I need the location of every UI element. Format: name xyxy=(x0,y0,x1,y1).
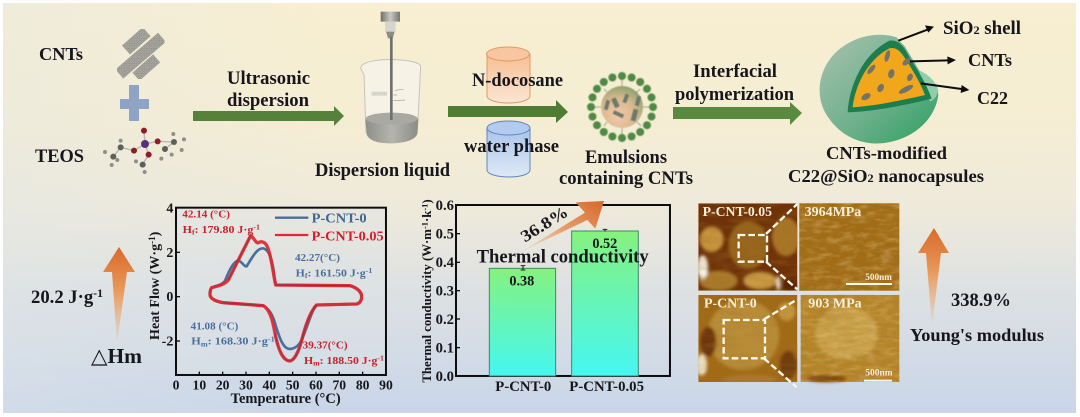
label: TEOS: TEOS xyxy=(35,147,84,167)
annotations: blue crystallization xyxy=(295,252,373,280)
annotations: blue crystallization: -1 xyxy=(366,266,373,275)
legend: P-CNT-0 xyxy=(312,211,367,226)
arrow: enthalpy increase xyxy=(103,247,135,344)
scale bars xyxy=(846,284,892,381)
plot frame xyxy=(456,205,670,376)
y axis tick labels: 0.5 xyxy=(436,227,454,243)
icon: carbon nanotubes xyxy=(119,32,162,77)
value label: 0.38: 0.38 xyxy=(509,274,534,290)
annotations: red melting: m xyxy=(313,359,320,368)
label: Ultrasonic dispersion: Ultrasonic xyxy=(227,69,310,89)
AFM labels: 3964MPa xyxy=(805,204,862,219)
x axis tick labels: 90 xyxy=(379,378,393,393)
label: 20.2 J/g: 20.2 J·g xyxy=(31,287,94,308)
annotations: blue crystallization: H xyxy=(296,267,304,279)
annotations: blue crystallization: : 161.50 J·g xyxy=(308,267,366,279)
x axis tick labels: 80 xyxy=(356,378,370,393)
annotations: red melting: -1 xyxy=(377,354,384,363)
x axis tick labels: 30 xyxy=(239,378,253,393)
label: Thermal conductivity: Thermal conductivity xyxy=(477,246,649,267)
plot frame xyxy=(176,208,386,375)
label: Emulsions containing CNTs: containing CNTs xyxy=(559,169,693,189)
curve: P-CNT-0.05 xyxy=(210,236,362,361)
chart: DSC heat flow curves xyxy=(147,201,393,407)
label: 20.2 J/g: -1 xyxy=(93,286,103,300)
chart: thermal conductivity bars xyxy=(420,198,670,395)
y axis tick labels: 0.0 xyxy=(436,369,454,385)
AFM labels: 500nm xyxy=(865,367,893,377)
icon: beaker with ultrasonic probe xyxy=(361,12,421,143)
panel: AFM images xyxy=(696,203,899,387)
AFM P-CNT-0.05 overview xyxy=(697,203,800,291)
annotations: red melting xyxy=(303,340,384,368)
annotations: blue melting: -1 xyxy=(268,334,275,343)
x axis tick labels: 0 xyxy=(173,378,180,393)
y axis tick labels: 4 xyxy=(166,201,173,216)
label: CNTs-modified C22@SiO2 nanocapsules: C22@SiO2 nanocapsules xyxy=(788,166,984,186)
x axis title: Temperature (°C) xyxy=(231,391,341,407)
y axis tick labels: 0.4 xyxy=(436,255,455,271)
arrow: conductivity increase xyxy=(523,201,604,251)
x axis tick labels: 60 xyxy=(309,378,323,393)
AFM P-CNT-0.05 detail xyxy=(799,203,899,291)
y axis tick labels: 2 xyxy=(166,246,173,261)
annotations: red crystallization: f xyxy=(192,228,195,237)
AFM P-CNT-0 overview xyxy=(696,295,797,384)
icon: water phase cylinder xyxy=(487,121,530,177)
label: CNTs-modified C22@SiO2 nanocapsules: CNTs-modified xyxy=(826,143,947,163)
icon: emulsion droplet xyxy=(587,72,657,142)
y axis tick labels: 0.3 xyxy=(436,284,454,300)
icon: nanocapsule cutaway xyxy=(820,35,938,144)
x axis labels: P-CNT-0.05 xyxy=(569,379,644,395)
bar: P-CNT-0 xyxy=(489,268,556,376)
AFM P-CNT-0 detail xyxy=(801,295,899,382)
icon: plus sign xyxy=(120,85,149,121)
bar: P-CNT-0.05 xyxy=(572,231,638,376)
arrow: to dispersion liquid xyxy=(193,106,344,126)
y axis title: -1 xyxy=(147,236,157,244)
x axis tick labels xyxy=(173,378,393,393)
y axis title: Heat Flow (W·g xyxy=(148,244,163,340)
label: 36.8%: 36.8% xyxy=(517,202,571,246)
y axis title: -1 xyxy=(421,204,430,211)
annotations: red melting: H xyxy=(304,355,313,367)
annotations: blue melting: 41.08 (°C) xyxy=(191,320,239,332)
annotations: red crystallization: 42.14 (°C) xyxy=(182,208,230,220)
annotations: blue melting xyxy=(191,320,275,348)
label: C22: C22 xyxy=(977,88,1008,108)
error bars xyxy=(521,229,607,270)
x axis labels: P-CNT-0 xyxy=(495,379,551,395)
y axis ticks xyxy=(456,234,460,348)
dashed zoom boxes xyxy=(724,204,797,387)
annotations: red crystallization xyxy=(182,208,260,237)
label: Dispersion liquid: Dispersion liquid xyxy=(315,160,450,181)
y axis tick labels: -2 xyxy=(162,335,173,350)
AFM labels: P-CNT-0 xyxy=(704,296,757,311)
y axis tick labels xyxy=(436,198,455,385)
annotations: red crystallization: -1 xyxy=(253,223,260,232)
x axis labels xyxy=(495,379,644,395)
annotations: red crystallization: : 179.80 J·g xyxy=(195,224,254,236)
y axis tick labels: 0.6 xyxy=(436,198,454,214)
y axis tick labels: 0 xyxy=(166,290,173,305)
axis ticks xyxy=(176,252,363,375)
x axis tick labels: 10 xyxy=(192,378,206,393)
label: Ultrasonic dispersion xyxy=(227,69,310,111)
y axis title: ·k xyxy=(420,210,434,222)
annotations: blue melting: H xyxy=(191,336,200,348)
label: SiO2 shell: SiO2 shell xyxy=(943,19,1021,39)
x axis tick labels: 50 xyxy=(286,378,300,393)
y axis tick labels: 0.2 xyxy=(436,312,454,328)
label: Interfacial polymerization: polymerization xyxy=(675,85,795,105)
AFM labels: 903 MPa xyxy=(808,296,862,311)
annotations: blue melting: : 168.30 J·g xyxy=(208,336,268,348)
value label: 0.52: 0.52 xyxy=(592,236,617,252)
annotations: red crystallization: H xyxy=(183,224,191,236)
y axis tick labels: 0.1 xyxy=(436,340,454,356)
label: water phase: water phase xyxy=(464,137,559,157)
arrows: capsule component leaders xyxy=(898,25,969,93)
label: Ultrasonic dispersion: dispersion xyxy=(227,91,310,111)
x axis tick labels: 20 xyxy=(216,378,230,393)
annotations: red melting: : 188.50 J·g xyxy=(320,355,378,367)
AFM labels: P-CNT-0.05 xyxy=(703,204,772,219)
label: 338.9%: 338.9% xyxy=(951,291,1011,311)
annotations: red melting: 39.37(°C) xyxy=(303,340,348,352)
label: Interfacial polymerization xyxy=(675,62,795,105)
label: Interfacial polymerization: Interfacial xyxy=(693,62,777,82)
legend: P-CNT-0.05 xyxy=(312,229,384,244)
label: Emulsions containing CNTs: Emulsions xyxy=(585,148,667,168)
legend xyxy=(275,211,384,244)
annotations: blue melting: m xyxy=(201,339,208,348)
y axis title: -1 xyxy=(421,222,430,229)
annotations: blue crystallization: f xyxy=(305,271,308,280)
arrow: to emulsions xyxy=(448,100,568,123)
y axis title: Thermal conductivity (W·m xyxy=(420,231,434,383)
curve: P-CNT-0 xyxy=(210,248,362,349)
x axis tick labels: 40 xyxy=(262,378,276,393)
AFM labels: 500nm xyxy=(865,272,892,282)
y axis title: ) xyxy=(148,231,163,236)
x axis tick labels: 70 xyxy=(332,378,346,393)
arrow: to nanocapsules xyxy=(673,102,802,125)
annotations: blue crystallization: 42.27(°C) xyxy=(295,252,340,264)
y axis tick labels xyxy=(162,201,173,350)
icon: TEOS molecule xyxy=(103,128,186,174)
y axis title: ) xyxy=(420,199,434,204)
label: CNTs: CNTs xyxy=(39,44,83,64)
arrow: modulus increase xyxy=(918,228,949,326)
label: N-docosane: N-docosane xyxy=(472,71,563,91)
label: CNTs component: CNTs xyxy=(968,50,1012,70)
icon: N-docosane cylinder xyxy=(486,47,530,103)
label: CNTs-modified C22@SiO2 nanocapsules xyxy=(788,143,984,186)
label: Young's modulus: Young's modulus xyxy=(910,325,1044,345)
AFM labels xyxy=(703,204,893,377)
label: Emulsions containing CNTs xyxy=(559,148,693,189)
label: delta Hm: △Hm xyxy=(91,344,143,368)
